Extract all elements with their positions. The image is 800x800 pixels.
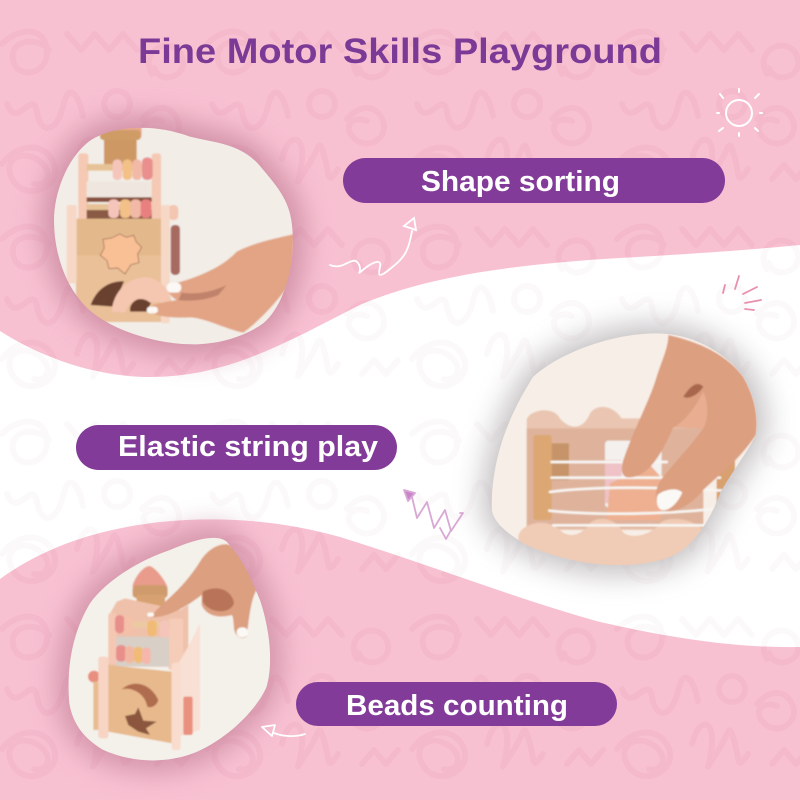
label pill: Beads counting <box>296 682 617 726</box>
icon: sparkle lines <box>723 276 761 310</box>
label pill: Shape sorting <box>343 158 725 203</box>
photo: elastic string play <box>487 317 773 583</box>
arrow: squiggle up to right <box>330 218 416 275</box>
label pill: Beads counting: Beads counting <box>346 690 568 722</box>
title: Fine Motor Skills Playground <box>138 32 662 71</box>
arrow: zigzag <box>404 490 463 539</box>
icon: sun <box>717 89 762 136</box>
label pill: Elastic string play: Elastic string play <box>118 431 378 463</box>
label pill: Shape sorting: Shape sorting <box>421 166 620 198</box>
white wave band <box>0 245 800 648</box>
photo: beads counting <box>57 527 283 773</box>
label pill: Elastic string play <box>76 425 397 470</box>
arrow: pointing left <box>262 725 305 736</box>
photo: shape sorting <box>47 107 313 363</box>
